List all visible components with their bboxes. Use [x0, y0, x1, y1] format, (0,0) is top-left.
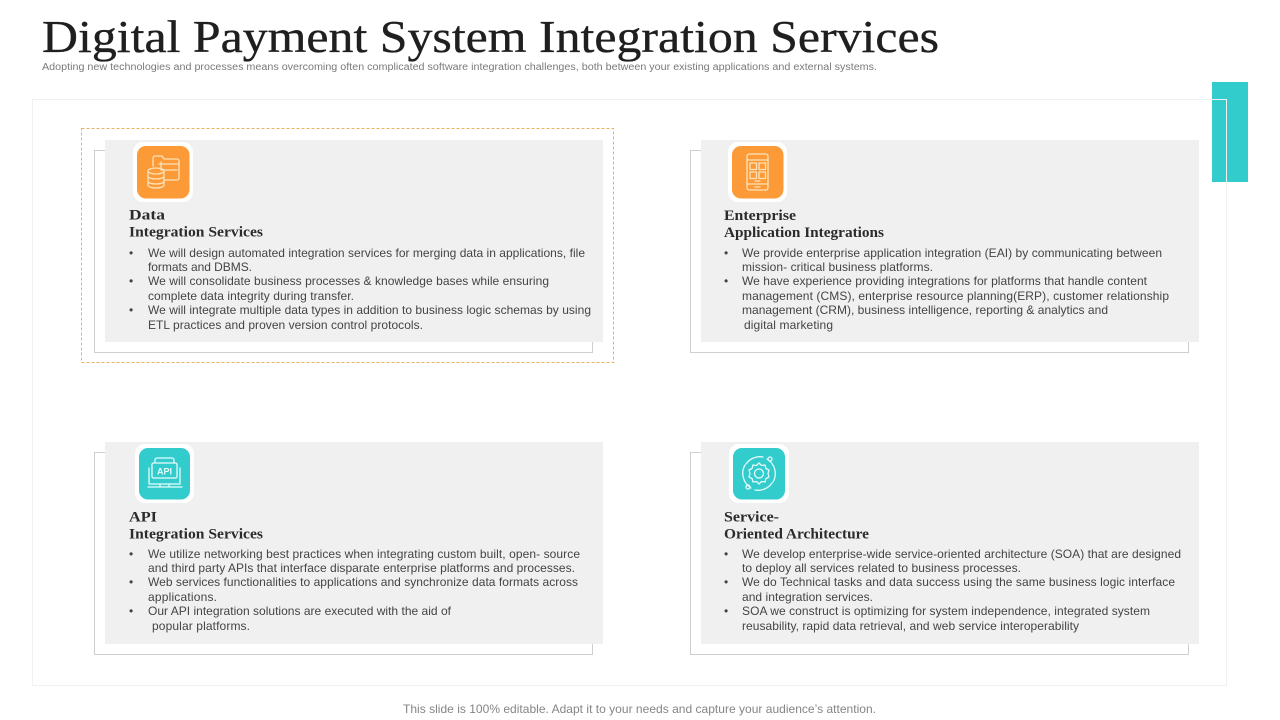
bullet list	[129, 246, 591, 332]
icon: gear with orbit	[729, 444, 789, 503]
bullet list: •	[724, 547, 728, 561]
subtitle: Adopting new technologies and processes means overcoming often complicated software integration challenges, both between your existing applications and external systems.	[42, 62, 877, 73]
bullet list: •	[724, 246, 728, 260]
heading: Application Integrations	[724, 225, 884, 241]
bullet list: management (CRM), business intelligence, reporting & analytics and	[742, 303, 1108, 317]
panel: api integration services	[94, 442, 603, 654]
heading	[129, 510, 263, 542]
card outline	[94, 150, 592, 352]
heading: Enterprise	[724, 208, 797, 224]
bullet list: •	[129, 604, 133, 618]
bullet list: We utilize networking best practices when integrating custom built, open- source	[148, 547, 580, 561]
bullet list: •	[129, 246, 133, 260]
card background	[105, 442, 603, 644]
heading: Service-	[724, 510, 779, 526]
panel: enterprise application integrations	[690, 140, 1199, 352]
dashed highlight frame	[82, 128, 614, 362]
panel: service-oriented architecture	[690, 442, 1199, 654]
card outline	[690, 150, 1188, 352]
bullet list: and third party APIs that interface disparate enterprise platforms and processes.	[148, 561, 575, 575]
bullet list: •	[129, 547, 133, 561]
bullet list	[724, 246, 1169, 332]
bullet list: •	[724, 604, 728, 618]
bullet list: We develop enterprise-wide service-oriented architecture (SOA) that are designed	[742, 547, 1181, 561]
icon: mobile app	[728, 142, 787, 202]
bullet list: ETL practices and proven version control protocols.	[148, 318, 423, 332]
bullet list: formats and DBMS.	[148, 260, 252, 274]
teal corner accent	[1212, 82, 1248, 182]
bullet list: to deploy all services related to business processes.	[742, 561, 1021, 575]
bullet list: Web services functionalities to applications and synchronize data formats across	[148, 575, 578, 589]
heading: Oriented Architecture	[724, 526, 870, 542]
heading	[129, 208, 263, 240]
bullet list: SOA we construct is optimizing for system independence, integrated system	[742, 604, 1150, 618]
heading: API	[129, 510, 157, 526]
bullet list	[724, 547, 1181, 633]
card background	[701, 140, 1199, 342]
bullet list: We will integrate multiple data types in addition to business logic schemas by using	[148, 303, 591, 317]
bullet list: •	[129, 274, 133, 288]
bullet list	[129, 547, 580, 633]
icon: api laptop: API	[157, 466, 172, 476]
bullet list: We will design automated integration services for merging data in applications, file	[148, 246, 585, 260]
card background	[701, 442, 1199, 644]
bullet list: digital marketing	[744, 318, 833, 332]
heading	[724, 510, 870, 542]
card background	[105, 140, 603, 342]
bullet list: •	[129, 575, 133, 589]
bullet list: popular platforms.	[152, 619, 250, 633]
bullet list: and integration services.	[742, 590, 873, 604]
bullet list: •	[724, 274, 728, 288]
bullet list: complete data integrity during transfer.	[148, 289, 354, 303]
card outline	[690, 452, 1188, 654]
outer panel	[32, 100, 1226, 686]
bullet list: mission- critical business platforms.	[742, 260, 933, 274]
bullet list: We do Technical tasks and data success using the same business logic interface	[742, 575, 1175, 589]
heading: Data	[129, 208, 166, 224]
panel: data integration services	[82, 128, 614, 362]
heading: Integration Services	[129, 526, 263, 542]
bullet list: management (CMS), enterprise resource planning(ERP), customer relationship	[742, 289, 1169, 303]
title: Digital Payment System Integration Services	[42, 11, 939, 62]
bullet list: •	[724, 575, 728, 589]
card outline	[94, 452, 592, 654]
bullet list: We have experience providing integrations for platforms that handle content	[742, 274, 1148, 288]
icon: api laptop	[135, 444, 194, 503]
bullet list: •	[129, 303, 133, 317]
bullet list: We will consolidate business processes & knowledge bases while ensuring	[148, 274, 549, 288]
bullet list: reusability, rapid data retrieval, and web service interoperability	[742, 619, 1079, 633]
heading	[724, 208, 884, 241]
bullet list: We provide enterprise application integration (EAI) by communicating between	[742, 246, 1162, 260]
footer note: This slide is 100% editable. Adapt it to your needs and capture your audience’s attention.	[403, 702, 876, 716]
bullet list: Our API integration solutions are executed with the aid of	[148, 604, 452, 618]
icon: folder and database	[133, 142, 193, 202]
bullet list: applications.	[148, 590, 217, 604]
heading: Integration Services	[129, 224, 263, 240]
